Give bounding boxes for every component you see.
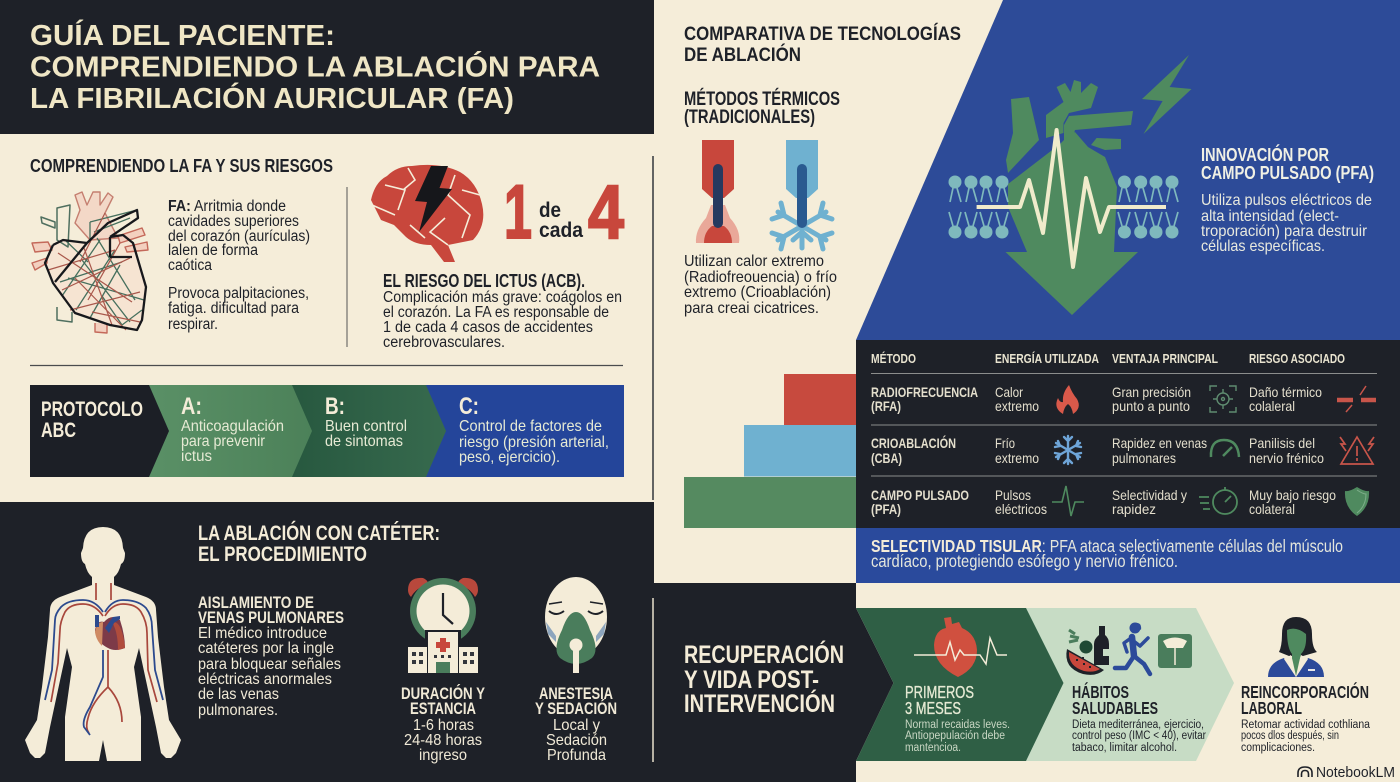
table row: cryoablation: CRIOABLACIÓN: [871, 434, 956, 451]
table header: [871, 351, 1345, 366]
table row: cryoablation: extremo: [995, 450, 1039, 466]
heading: procedure: [198, 521, 440, 566]
table row: pulsed field: Muy bajo riesgo: [1249, 487, 1336, 503]
heading: thermal methods: (TRADICIONALES): [684, 107, 815, 128]
icon: snowflake: [1055, 436, 1081, 464]
icon: body with vascular system: [25, 527, 181, 761]
text: PFA innovation: troporación) para destruir: [1201, 223, 1368, 240]
title banner: LA FIBRILACIÓN AURICULAR (FA): [30, 83, 514, 115]
icon: pulse: [1052, 486, 1084, 516]
text: AF definition: lalen de forma: [168, 242, 258, 259]
recovery step: healthy habits: HÁBITOS: [1072, 681, 1129, 702]
panel: recovery heading: RECUPERACIÓN: [684, 639, 844, 669]
recovery step: returning to work: LABORAL: [1241, 698, 1302, 718]
heading: technology comparison: [684, 22, 961, 66]
text: pulmonary vein isolation: pulmonares.: [198, 702, 278, 719]
table row: radiofrequency: RADIOFRECUENCIA: [871, 384, 978, 400]
table row: radiofrequency: (RFA): [871, 398, 901, 414]
table row: pulsed field: [871, 487, 1336, 517]
text: AF definition: cavidades superiores: [168, 213, 299, 230]
panel: recovery heading: INTERVENCIÓN: [684, 688, 835, 718]
icon: radiofrequency probe: [696, 140, 739, 243]
step A: para prevenir: [181, 433, 266, 450]
icon: wireframe heart: [32, 192, 148, 333]
callout: tissue selectivity: cardíaco, protegiendo esófego y nervio frénico.: [871, 551, 1178, 571]
text: anesthesia and sedation: Profunda: [547, 747, 606, 764]
step A: A:: [181, 393, 202, 420]
icon: red heart with pulse: [914, 617, 1007, 677]
text: thermal description: Utilizan calor extremo: [684, 253, 824, 270]
recovery step: returning to work: complicaciones.: [1241, 742, 1315, 754]
table row: cryoablation: Frío: [995, 435, 1015, 451]
table row: pulsed field: (PFA): [871, 501, 901, 517]
table row: radiofrequency: Calor: [995, 384, 1023, 400]
text: PFA innovation: [1201, 144, 1374, 255]
comparison table: [856, 340, 1400, 528]
recovery step: healthy habits: SALUDABLES: [1072, 698, 1158, 718]
panel: thermal methods: [684, 22, 961, 528]
text: anesthesia and sedation: Y SEDACIÓN: [535, 699, 617, 718]
table row: radiofrequency: Daño térmico: [1249, 384, 1322, 400]
recovery step: light green arrow: [1020, 608, 1234, 761]
table row: pulsed field: Selectividad y: [1112, 487, 1187, 503]
text: AF definition: [168, 198, 310, 333]
heading: procedure: LA ABLACIÓN CON CATÉTER:: [198, 521, 440, 545]
recovery step: returning to work: [1241, 617, 1371, 754]
icon: warning triangle: [1340, 437, 1374, 464]
text: stroke risk: cerebrovasculares.: [383, 334, 505, 351]
step C: [459, 393, 609, 466]
table row: cryoablation: [871, 434, 1324, 466]
text: PFA innovation: Utiliza pulsos eléctricos de: [1201, 192, 1372, 209]
recovery step: returning to work: Retomar actividad cothliana: [1241, 719, 1371, 731]
recovery step: returning to work: pocos dlos después, sin: [1241, 730, 1339, 742]
text: AF definition: caótica: [168, 257, 212, 274]
icon: food, runner and scale: [1066, 622, 1192, 675]
table row: pulsed field: CAMPO PULSADO: [871, 487, 969, 503]
table row: radiofrequency: Gran precisión: [1112, 384, 1191, 400]
table row: cryoablation: nervio frénico: [1249, 450, 1324, 466]
text: pulmonary vein isolation: de las venas: [198, 686, 279, 703]
text: duration and stay: 24-48 horas: [404, 732, 482, 749]
step B: de sintomas: [325, 433, 403, 450]
panel: recovery heading: Y VIDA POST-: [684, 666, 819, 694]
text: thermal description: extremo (Crioablación): [684, 284, 831, 301]
icon: brain with lightning bolt: [371, 165, 483, 262]
text: duration and stay: ESTANCIA: [410, 700, 476, 718]
text: AF definition: del corazón (aurículas): [168, 228, 310, 245]
step B: Buen control: [325, 418, 407, 435]
title banner: COMPRENDIENDO LA ABLACIÓN PARA: [30, 52, 600, 84]
statistic: 1 in 4: de: [539, 199, 561, 222]
table row: cryoablation: Rapidez en venas: [1112, 435, 1207, 451]
recovery step: first three months: PRIMEROS: [905, 682, 974, 702]
icon: flame: [1056, 385, 1079, 414]
text: AF definition: fatiga. dificultad para: [168, 300, 299, 317]
text: pulmonary vein isolation: AISLAMIENTO DE: [198, 594, 314, 612]
panel: catheter ablation procedure: [0, 502, 654, 782]
table row: radiofrequency: [871, 384, 1322, 414]
statistic: 1 in 4: cada: [539, 219, 583, 242]
text: pulmonary vein isolation: para bloquear señales: [198, 656, 341, 673]
step C: Control de factores de: [459, 418, 602, 435]
table row: cryoablation: Panilisis del: [1249, 435, 1315, 451]
statistic: 1 in 4: 4: [588, 170, 624, 255]
text: duration and stay: [401, 684, 485, 764]
table header: ENERGÍA UTILIZADA: [995, 351, 1099, 366]
text: duration and stay: 1-6 horas: [413, 717, 474, 734]
text: thermal description: (Radiofreouencia) o frío: [684, 269, 837, 286]
step A: [181, 393, 284, 465]
step C: C:: [459, 393, 479, 420]
step A: Anticoagulación: [181, 418, 284, 435]
text: thermal description: [684, 253, 837, 317]
text: stroke risk: [383, 271, 622, 351]
step C: peso, ejercicio).: [459, 449, 560, 466]
icon: anesthesia mask: [545, 577, 607, 673]
panel: recovery heading: [653, 583, 894, 782]
text: anesthesia and sedation: ANESTESIA: [539, 685, 613, 703]
text: duration and stay: DURACIÓN Y: [401, 684, 485, 703]
step B: [325, 393, 407, 450]
text: PFA innovation: células específicas.: [1201, 238, 1325, 255]
NotebookLM logo: NotebookLM: [1316, 764, 1395, 781]
icon: shield: [1345, 487, 1369, 516]
text: pulmonary vein isolation: El médico introduce: [198, 625, 327, 642]
heading: technology comparison: DE ABLACIÓN: [684, 42, 801, 66]
table header: RIESGO ASOCIADO: [1249, 351, 1345, 366]
text: pulmonary vein isolation: VENAS PULMONARES: [198, 609, 344, 627]
table row: cryoablation: (CBA): [871, 450, 902, 466]
recovery step: first three months: Normal recaidas leves.: [905, 719, 1010, 731]
ABC protocol bar: PROTOCOLO: [41, 398, 143, 421]
recovery step: first three months: [856, 608, 1064, 761]
text: anesthesia and sedation: [535, 685, 617, 764]
recovery step: healthy habits: control peso (IMC < 40), evitar: [1072, 730, 1206, 742]
panel: pulsed field innovation: [856, 0, 1400, 340]
recovery step: first three months: 3 MESES: [905, 698, 961, 718]
heading: thermal methods: [684, 88, 840, 128]
icon: heart and membrane with pulse: [948, 55, 1192, 315]
panel: understanding AF and risks: [0, 134, 654, 502]
table header: VENTAJA PRINCIPAL: [1112, 351, 1218, 366]
stepped bars: [684, 374, 856, 528]
title banner: GUÍA DEL PACIENTE:: [30, 20, 335, 52]
icon: target: [1210, 386, 1236, 412]
recovery step: first three months: mantencioa.: [905, 742, 961, 754]
table row: radiofrequency: punto a punto: [1112, 398, 1190, 414]
title banner: [0, 0, 654, 134]
text: stroke risk: el corazón. La FA es responsable de: [383, 304, 609, 321]
text: AF definition: respirar.: [168, 316, 218, 333]
text: pulmonary vein isolation: [198, 594, 344, 719]
table row: pulsed field: rapidez: [1112, 501, 1156, 517]
icon: stopwatch: [1199, 487, 1237, 514]
text: AF definition: Provoca palpitaciones,: [168, 285, 309, 302]
text: pulmonary vein isolation: catéteres por la ingle: [198, 640, 334, 657]
text: AF definition: FA: Arritmia donde: [168, 198, 286, 215]
text: duration and stay: ingreso: [419, 747, 467, 764]
table row: cryoablation: pulmonares: [1112, 450, 1176, 466]
text: anesthesia and sedation: Sedación: [546, 732, 607, 749]
table header: MÉTODO: [871, 351, 916, 366]
text: pulmonary vein isolation: eléctricas anormales: [198, 671, 332, 688]
recovery step: healthy habits: tabaco, limitar alcohol.: [1072, 742, 1177, 754]
icon: cryoablation probe: [772, 140, 832, 249]
table row: pulsed field: Pulsos: [995, 487, 1031, 503]
table row: pulsed field: eléctricos: [995, 501, 1047, 517]
icon: professional woman: [1268, 617, 1324, 677]
text: PFA innovation: alta intensidad (elect-: [1201, 208, 1339, 225]
table row: radiofrequency: colaleral: [1249, 398, 1295, 414]
ABC protocol bar: [30, 385, 624, 477]
heading: thermal methods: MÉTODOS TÉRMICOS: [684, 88, 840, 110]
text: stroke risk: 1 de cada 4 casos de accidentes: [383, 319, 593, 336]
text: stroke risk: EL RIESGO DEL ICTUS (ACB).: [383, 271, 585, 291]
step C: riesgo (presión arterial,: [459, 434, 609, 451]
callout: tissue selectivity: SELECTIVIDAD TISULAR: PFA ataca selectivamente células del músculo: [871, 536, 1343, 556]
icon: broken line: [1337, 386, 1376, 412]
text: anesthesia and sedation: Local y: [553, 717, 600, 734]
step B: B:: [325, 393, 345, 420]
step A: ictus: [181, 448, 212, 465]
text: thermal description: para creai cicatrices.: [684, 300, 819, 317]
text: PFA innovation: INNOVACIÓN POR: [1201, 144, 1329, 165]
recovery step: healthy habits: Dieta mediterránea, ejercicio,: [1072, 719, 1204, 731]
recovery step: first three months: Antiopepulación debe: [905, 730, 1005, 742]
statistic: 1 in 4: 1: [504, 170, 532, 255]
heading: procedure: EL PROCEDIMIENTO: [198, 543, 367, 566]
recovery step: healthy habits: [1066, 622, 1206, 754]
table row: pulsed field: colateral: [1249, 501, 1295, 517]
icon: gauge: [1211, 440, 1239, 457]
statistic: 1 in 4: [504, 170, 624, 255]
heading: understanding AF: COMPRENDIENDO LA FA Y SUS RIESGOS: [30, 155, 333, 176]
text: stroke risk: Complicación más grave: coágolos en: [383, 289, 622, 306]
ABC protocol bar: ABC: [41, 419, 76, 442]
table row: radiofrequency: extremo: [995, 398, 1039, 414]
callout: tissue selectivity: [856, 528, 1400, 583]
heading: technology comparison: COMPARATIVA DE TECNOLOGÍAS: [684, 22, 961, 45]
icon: clock and hospital: [408, 578, 478, 674]
